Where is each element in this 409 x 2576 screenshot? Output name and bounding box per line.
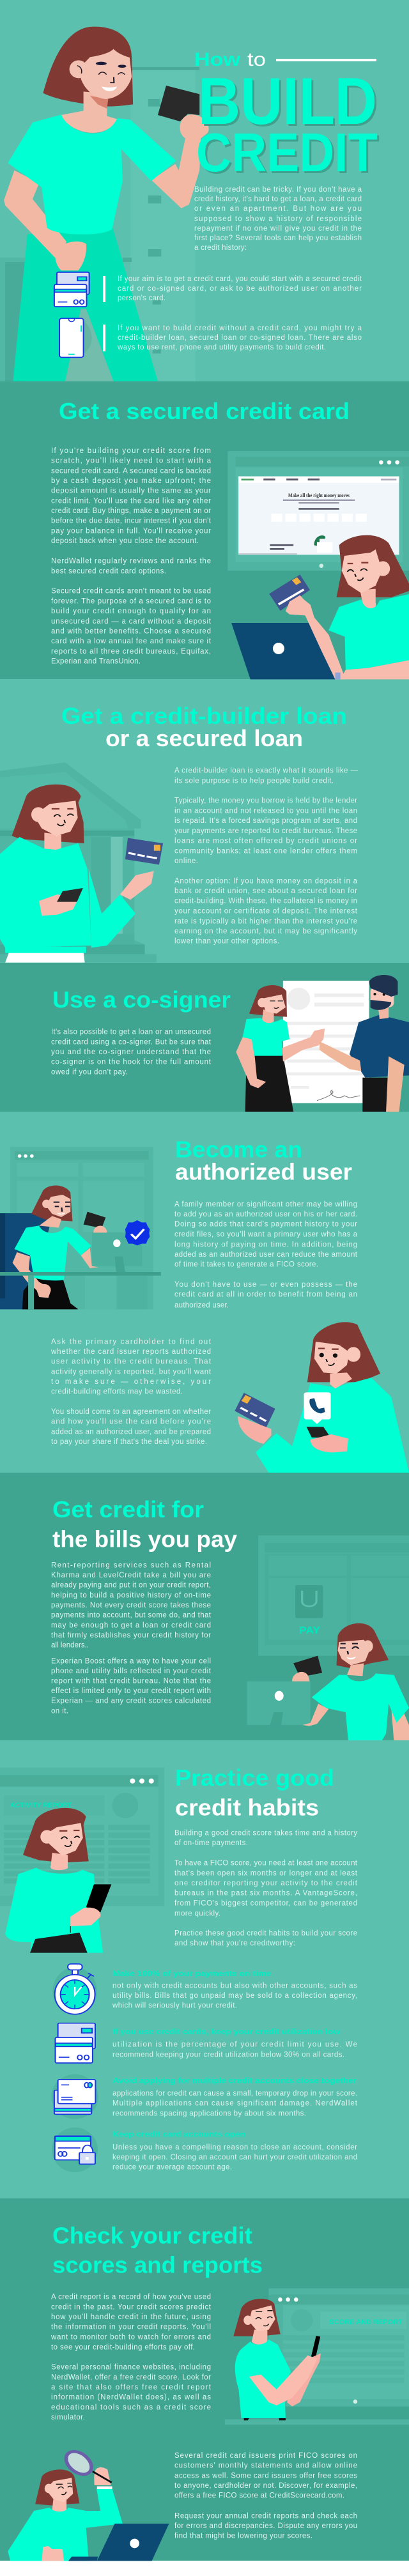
text block: co-signer body: credit card using a co-signer. But be sure that <box>51 1038 212 1046</box>
text block: credit report body: A credit report is a record of how you've used <box>51 2294 211 2301</box>
heading: credit scores and reports <box>52 2223 263 2278</box>
text block: intro: supposed to show a history of responsible <box>194 215 362 223</box>
text block: co-signer body: co-signer is on the hook for the full amount <box>51 1059 212 1066</box>
text block: credit card route: card or co-signed card, or ask to be authorized user on another <box>118 285 362 293</box>
text block: intro: or even an apartment. But how are you <box>194 205 362 213</box>
text block: credit-builder loan body: A credit-builder loan is exactly what it sounds like — <box>174 767 358 775</box>
heading: secured credit card: Get a secured credit card <box>59 398 350 424</box>
text block: credit habits intro: Practice these good credit habits to build your score <box>174 1929 357 1937</box>
text block: credit habits intro: Building a good credit score takes time and a history <box>174 1829 357 1837</box>
text block: intro <box>194 186 362 252</box>
illustration: woman at desk with verified badge <box>0 1147 161 1309</box>
text block: secured card body: forever. The purpose of a secured card is to <box>51 597 211 605</box>
text block: FICO scores and reports body: Several credit card issuers print FICO scores on <box>174 2452 357 2460</box>
text block: co-signer body: It's also possible to get a loan or an unsecured <box>51 1029 211 1036</box>
text block: FICO scores and reports body: Request your annual credit reports and check each <box>174 2512 357 2520</box>
illustration: payment window and woman <box>247 1535 409 1740</box>
text block: credit-builder loan body: lower than your other options. <box>174 938 279 946</box>
icon: credit cards low utilization <box>56 2023 95 2063</box>
text block: credit-builder loan body: in an account and not released to you until the loan <box>174 807 357 815</box>
illustration: activity report window <box>0 1768 164 1906</box>
illustration: website browser window <box>228 451 409 571</box>
text block: authorized user body: added as an authorized user can reduce the amount <box>174 1251 358 1259</box>
heading: credit-builder loan <box>61 703 347 751</box>
title: to <box>247 49 266 70</box>
text block: secured card body: Experian and TransUnion. <box>51 658 141 666</box>
heading: credit scores and reports: scores and reports <box>52 2252 263 2278</box>
heading: co-signer: Use a co-signer <box>52 986 231 1013</box>
title: BUILD <box>200 66 379 141</box>
text block: FICO scores and reports body: offers a free FICO score at CreditScorecard.com. <box>174 2492 344 2500</box>
text block: credit-builder loan body: Typically, the money you borrow is held by the lender <box>174 797 357 805</box>
text block: credit-builder loan body: online. <box>174 857 198 865</box>
heading: bills you pay: the bills you pay <box>52 1526 237 1552</box>
title <box>194 49 380 185</box>
text block: credit card route: person's card. <box>118 295 166 302</box>
text: score and report label: SCORE AND REPORT <box>329 2319 403 2326</box>
text block: credit-builder loan body: loans are most often offered by credit unions or <box>174 838 357 845</box>
text block: bills body: helping to build a positive history of on-time <box>51 1591 211 1599</box>
text block: secured card body: best secured credit card options. <box>51 567 166 575</box>
text block: secured card body: before the due date, incur interest if you don't <box>51 518 212 525</box>
text block: secured card body: NerdWallet regularly reviews and ranks the <box>51 558 211 565</box>
text block: credit utilization: If you use credit cards, keep your credit utilization low <box>112 2028 340 2036</box>
text block: cardholder advice: to pay your share if that's the deal you strike. <box>51 1438 207 1446</box>
heading: credit habits: Practice good <box>175 1765 334 1791</box>
text block: authorized user body: long history of paying on time. In addition, being <box>174 1241 357 1248</box>
text block: secured card body: pay your balance in full. You'll receive your <box>51 527 211 535</box>
text block: spaced applications <box>112 2078 358 2117</box>
text block: no credit card route: credit-builder loan, secured loan or co-signed loan. There are also <box>118 334 362 342</box>
text block: cardholder advice: user activity to the credit bureaus. That <box>51 1358 212 1366</box>
text block: cardholder advice: whether the card issuer reports authorized <box>50 1348 211 1356</box>
text block: payments on time: which will seriously hurt your credit. <box>112 2002 237 2010</box>
text: website headline: Make all the right money moves <box>288 493 350 498</box>
text block: credit-builder loan body: your account or certificate of deposit. The interest <box>174 907 358 915</box>
text block: bills body: phone and utility bills reflected in your credit <box>51 1667 212 1675</box>
heading: authorized user <box>175 1137 352 1185</box>
text block: no credit card route: ways to use rent, phone and utility payments to build credit. <box>117 344 326 351</box>
text block: credit habits intro: one creditor reporting your activity to the credit <box>174 1880 358 1887</box>
text block: credit habits intro: of on-time payments. <box>174 1839 248 1847</box>
text block: co-signer body: owed if you don't pay. <box>51 1068 128 1076</box>
icon: smartphone <box>59 318 84 357</box>
icon: locked credit card <box>52 2128 98 2172</box>
text block: secured card body: deposit back when you close the account. <box>51 537 199 545</box>
illustration: woman with magnifying glass and laptop <box>8 2448 169 2561</box>
heading: authorized user: authorized user <box>175 1159 352 1185</box>
heading: bills you pay: Get credit for <box>52 1496 204 1522</box>
heading: credit-builder loan: Get a credit-builder loan <box>61 703 347 729</box>
text block: cardholder advice: and how you'll use the card before you're <box>51 1418 211 1426</box>
text block: credit report body: to see your credit-building efforts pay off. <box>51 2343 195 2351</box>
text block: intro: credit history, it's hard to get a loan, a credit card <box>194 195 362 203</box>
text block: credit habits intro: To have a FICO score, you need at least one account <box>174 1860 358 1867</box>
text block: keep accounts open: Keep credit card accounts open <box>112 2131 245 2139</box>
text block: bills body: payments. Not every credit score takes these <box>51 1602 211 1609</box>
text block: credit-builder loan body: rate is typically a bit higher than the interest you're <box>174 917 357 925</box>
text block: credit-builder loan body: earning on the account, but it may be significantly <box>174 928 357 935</box>
divider: second bullet bar <box>103 325 105 351</box>
text block: bills body: Experian Boost offers a way to have your cell <box>51 1657 211 1665</box>
text block: bills body: Rent-reporting services such as Rental <box>51 1561 211 1569</box>
text block: payments on time: not only with credit accounts but also with other accounts, such as <box>112 1982 357 1989</box>
text block: authorized user body: authorized user. <box>174 1302 229 1310</box>
text block: no credit card route <box>117 325 362 351</box>
text block: FICO scores and reports body <box>174 2452 357 2540</box>
text block: no credit card route: If you want to build credit without a credit card, you might try a <box>118 325 362 332</box>
text block: intro: first place? Several tools can help you establish <box>194 234 362 242</box>
text block: credit report body: a site that also offers free credit report <box>51 2384 212 2391</box>
text block: secured card body: build your credit enough to qualify for an <box>51 608 211 615</box>
text block: secured card body: deposit amount is usually the same as your <box>51 487 211 495</box>
text block: payments on time <box>112 1970 357 2010</box>
illustration: woman with laptop and card <box>231 535 409 679</box>
text block: bills body: Experian — and any credit scores calculated <box>51 1698 211 1705</box>
heading: authorized user: Become an <box>175 1137 302 1163</box>
heading: credit habits: credit habits <box>175 1795 319 1821</box>
text block: FICO scores and reports body: find that might be lowering your scores. <box>174 2533 313 2540</box>
text block: spaced applications: Multiple applications can cause significant damage. NerdWallet <box>112 2100 358 2108</box>
text block: credit report body: want to monitor both to watch for errors and <box>50 2333 211 2341</box>
text block: keep accounts open: keeping it open. Closing an account can hurt your credit utilization and <box>112 2154 357 2161</box>
title: CREDIT <box>196 123 378 183</box>
illustration: woman checking phone <box>233 2299 321 2420</box>
text block: authorized user body <box>174 1200 358 1310</box>
illustration: woman and man shaking hands over contract <box>236 975 409 1112</box>
text block: authorized user body: credit files, so you'll want a primary user who has a <box>174 1231 358 1239</box>
text block: bills body: already paying and put it on your credit report, <box>51 1582 211 1590</box>
text block: credit habits intro: bureaus in the past six months. A VantageScore, <box>174 1890 357 1897</box>
text block: credit utilization: recommend keeping your credit utilization below 30% on all cards. <box>112 2051 344 2058</box>
text block: spaced applications: Avoid applying for multiple credit accounts close together <box>112 2078 357 2085</box>
text block: credit report body <box>50 2294 212 2421</box>
text block: bills body: on it. <box>51 1707 68 1715</box>
text block: credit-builder loan body: your payments are reported to credit bureaus. These <box>174 827 357 835</box>
text block: credit report body: NerdWallet, offer a free credit score. Look for <box>51 2373 211 2381</box>
text block: credit report body: the information in your credit reports. You'll <box>51 2324 211 2331</box>
title: How <box>194 49 241 70</box>
illustration: woman with smartphone <box>5 1808 111 1953</box>
text block: spaced applications: applications for credit can cause a small, temporary drop in your score. <box>112 2090 357 2097</box>
text block: intro: a credit history: <box>194 244 247 252</box>
text block: credit-builder loan body: Another option: If you have money on deposit in a <box>174 877 358 885</box>
text block: credit habits intro: that's been open six months or longer and at least <box>174 1869 358 1877</box>
text block: cardholder advice: activity generally is reported, but you'll want <box>51 1368 212 1376</box>
text block: authorized user body: A family member or significant other may be willing <box>174 1200 357 1208</box>
icon: multiple credit cards <box>51 2074 98 2119</box>
text block: authorized user body: of time it takes to generate a FICO score. <box>174 1261 318 1269</box>
text block: secured card body: and with better benefits. Choose a secured <box>51 627 211 635</box>
text block: cardholder advice: Ask the primary cardholder to find out <box>51 1338 212 1346</box>
text block: co-signer body: you and the co-signer understand that the <box>51 1048 211 1056</box>
text block: secured card body: credit limit. You'll use the card like any other <box>51 497 211 505</box>
text block: keep accounts open <box>112 2131 357 2172</box>
text block: FICO scores and reports body: access as well. Some card issuers offer free scores <box>174 2472 357 2480</box>
text block: credit habits intro: from FICO's biggest competitor, can be generated <box>174 1900 357 1908</box>
text block: bills body: that firmly establishes your credit history for <box>51 1632 211 1639</box>
text block: secured card body: Secured credit cards aren't meant to be used <box>51 588 211 595</box>
text block: bills body: payments into account, but some do, and that <box>51 1612 212 1620</box>
text block: credit habits intro: more quickly. <box>174 1910 220 1917</box>
text block: bills body <box>51 1561 212 1715</box>
illustration: woman with card and phone <box>235 1322 409 1473</box>
text block: cardholder advice: added as an authorized user, and be prepared <box>51 1428 211 1436</box>
text block: credit habits intro: and show that you're creditworthy: <box>174 1940 295 1947</box>
text block: payments on time: utility bills. Bills that go unpaid may be sold to a collection agency, <box>112 1992 357 2000</box>
divider: first bullet bar <box>103 276 105 302</box>
text block: keep accounts open: reduce your average account age. <box>112 2164 232 2172</box>
text block: FICO scores and reports body: for errors and discrepancies. Dispute any errors you <box>174 2522 357 2530</box>
text block: credit-builder loan body: credit-building. With these, the collateral is money in <box>174 898 357 905</box>
text block: cardholder advice <box>50 1338 212 1446</box>
text block: credit card route <box>118 275 362 302</box>
title: BUILD <box>198 65 377 139</box>
text block: credit-builder loan body: bank or credit union, see about a secured loan for <box>174 887 357 895</box>
text block: credit report body: Several personal finance websites, including <box>51 2364 211 2372</box>
text block: authorized user body: You don't have to use — or even possess — the <box>174 1281 357 1289</box>
text block: secured card body: unsecured card — a card without a deposit <box>51 618 212 625</box>
heading: credit scores and reports: Check your credit <box>52 2223 252 2249</box>
illustration: score and report window <box>225 2288 409 2425</box>
text block: credit utilization: utilization is the percentage of your credit limit you use. We <box>112 2041 357 2048</box>
text block: secured card body: by a cash deposit you make upfront; the <box>51 477 211 485</box>
text block: bills body: may be enough to get a loan or credit card <box>51 1621 211 1629</box>
text block: payments on time: Make 100% of your payments on time <box>112 1970 271 1978</box>
text block: FICO scores and reports body: to anyone, cardholder or not. Discover, for example, <box>174 2482 357 2490</box>
heading: bills you pay <box>52 1496 237 1552</box>
text: activity report label: ACTIVITY REPORT <box>10 1802 72 1809</box>
text block: intro: repayment if no one will give you credit in the <box>194 225 362 233</box>
text block: cardholder advice: to make sure — otherwise, your <box>51 1378 211 1386</box>
text block: credit report body: educational tools such as a credit score <box>51 2404 211 2411</box>
text block: credit card route: If your aim is to get a credit card, you could start with a secured credit <box>118 275 362 283</box>
text block: cardholder advice: credit-building efforts may be wasted. <box>51 1388 183 1396</box>
text block: secured card body: secured credit card. A secured card is backed <box>51 467 211 475</box>
text block: credit report body: credit in the past. Your credit scores predict <box>51 2303 212 2311</box>
text block: credit report body: how you'll handle credit in the future, using <box>51 2313 211 2321</box>
text: PAY label: PAY <box>299 1625 320 1636</box>
text block: secured card body <box>51 447 212 666</box>
text block: co-signer body <box>51 1029 212 1076</box>
illustration: woman holding card in hero <box>0 27 209 381</box>
text block: secured card body: card with a low annual fee and make sure it <box>51 638 212 645</box>
text block: bills body: report with that credit bureau. Note that the <box>51 1677 211 1685</box>
text block: credit report body: information (NerdWallet does), as well as <box>51 2394 211 2402</box>
text block: credit-builder loan body: is repaid. It's a forced savings program of sorts, and <box>174 817 357 825</box>
text block: authorized user body: to add you as an authorized user on his or her card. <box>174 1211 357 1218</box>
text block: credit utilization <box>112 2028 357 2058</box>
icon: stopwatch <box>52 1964 97 2015</box>
text block: spaced applications: recommends spacing applications by about six months. <box>112 2110 306 2117</box>
text block: secured card body: If you're building your credit score from <box>51 447 211 455</box>
text block: credit report body: simulator. <box>51 2414 85 2421</box>
text block: FICO scores and reports body: customers' monthly statements and allow online <box>174 2462 357 2470</box>
text block: intro: Building credit can be tricky. If you don't have a <box>194 186 362 194</box>
text block: secured card body: credit card: Buy things, make a payment on or <box>51 507 211 515</box>
text block: bills body: all lenders.. <box>51 1642 89 1650</box>
text block: credit-builder loan body: community banks; at least one lender offers them <box>174 847 357 855</box>
text block: cardholder advice: You should come to an agreement on whether <box>51 1408 211 1416</box>
icon: credit cards <box>54 272 89 307</box>
text block: secured card body: scratch, you'll likely need to start with a <box>51 457 212 465</box>
illustration: woman outside bank <box>0 762 163 963</box>
text block: bills body: effect is limited only to your credit report with <box>51 1687 211 1695</box>
text block: bills body: Kharma and LevelCredit take a bill you are <box>51 1572 211 1579</box>
text block: credit habits intro <box>174 1829 358 1947</box>
title: CREDIT <box>198 125 380 185</box>
heading: credit-builder loan: or a secured loan <box>105 725 303 751</box>
text block: credit-builder loan body <box>174 767 358 946</box>
heading: credit habits <box>175 1765 334 1821</box>
text block: credit-builder loan body: its sole purpose is to help people build credit. <box>174 778 334 785</box>
text block: secured card body: reports to all three credit bureaus, Equifax, <box>51 648 211 656</box>
text block: keep accounts open: Unless you have a compelling reason to close an account, consider <box>112 2143 357 2151</box>
text block: authorized user body: credit card at all in order to benefit from being an <box>174 1291 357 1299</box>
text block: authorized user body: Doing so adds that card's payment history to your <box>174 1221 357 1229</box>
